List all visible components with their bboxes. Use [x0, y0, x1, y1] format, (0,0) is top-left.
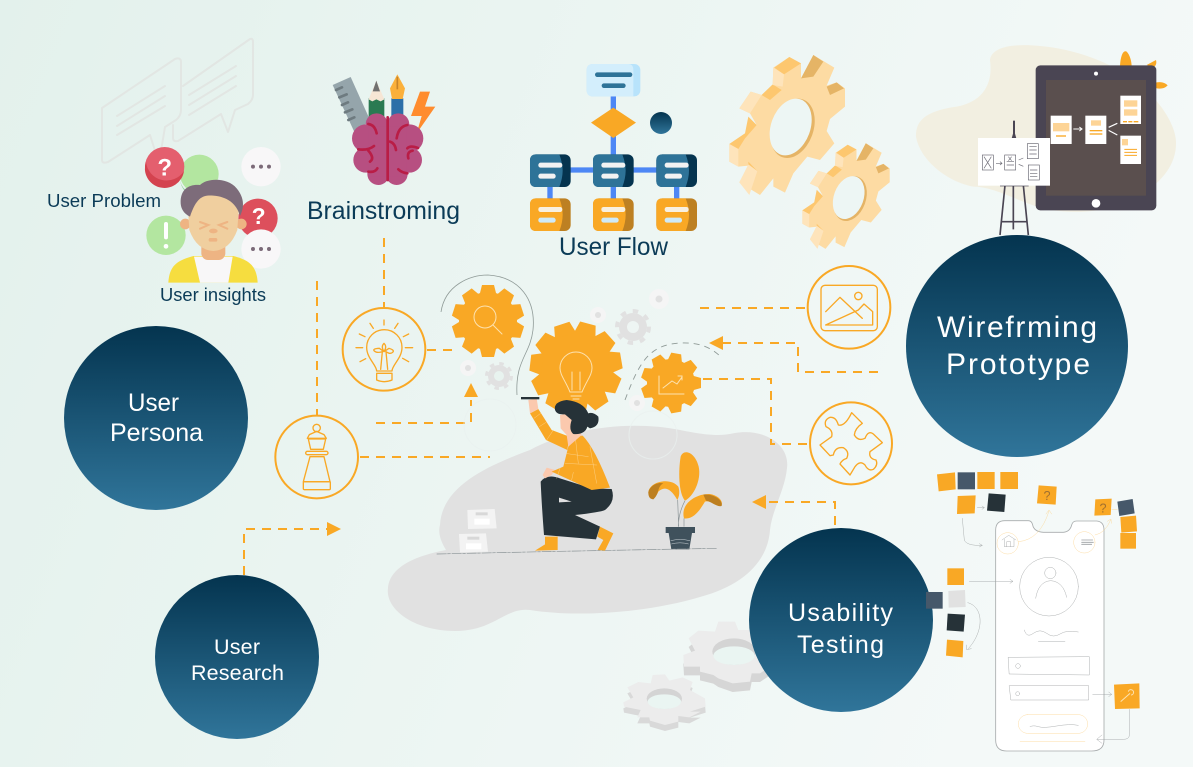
circle: user persona: User: [128, 389, 179, 417]
icon: large pale gears: [729, 55, 890, 249]
circle: wireframing prototype: Wirefrming: [937, 311, 1097, 344]
small dark dot: [650, 112, 672, 134]
circle: usability testing: Testing: [797, 631, 884, 659]
wireframe illustration: phone and sticky notes: ?: [1043, 489, 1051, 503]
label: user problem: User Problem: [47, 190, 161, 211]
wireframe illustration: tablet and easel: [916, 45, 1176, 235]
woman kneeling and drawing: [521, 397, 613, 551]
wireframe illustration: phone and sticky notes: ?: [1099, 501, 1107, 515]
icon: picture circle: [808, 266, 890, 349]
circle: usability testing: [749, 528, 933, 712]
heading: user flow: User Flow: [559, 233, 669, 261]
icon: user flow diagram: [530, 64, 697, 231]
circle: usability testing: Usability: [788, 599, 894, 627]
icon: frustrated user with bubbles: ?: [252, 203, 266, 229]
circle: user research: User: [214, 635, 260, 659]
grey isometric gears: [623, 622, 770, 731]
wireframe illustration: phone and sticky notes: [926, 472, 1140, 751]
label: user insights: User insights: [160, 284, 266, 305]
icon: brain with tools: [333, 74, 435, 185]
icon: frustrated user with bubbles: ?: [157, 154, 172, 181]
icon: frustrated user with bubbles: [145, 147, 281, 283]
circle: wireframing prototype: Prototype: [946, 348, 1090, 381]
circle: wireframing prototype: [906, 235, 1128, 457]
arrowheads: [327, 336, 766, 536]
faint speech bubbles: [102, 39, 253, 163]
circle: user persona: Persona: [110, 419, 203, 447]
icon: chess piece circle: [275, 416, 358, 498]
icon: puzzle circle: [810, 402, 892, 484]
circle: user research: Research: [191, 661, 284, 685]
dashed connectors: [244, 238, 885, 575]
plant, notes and ground line: [437, 452, 722, 554]
icon: lightbulb circle: [343, 308, 425, 391]
heading: brainstroming: Brainstroming: [307, 197, 460, 225]
circle: user research: [155, 575, 319, 739]
central gears and doodle: [441, 275, 722, 459]
circle: user persona: [64, 326, 248, 510]
grey background blob: [388, 426, 787, 631]
